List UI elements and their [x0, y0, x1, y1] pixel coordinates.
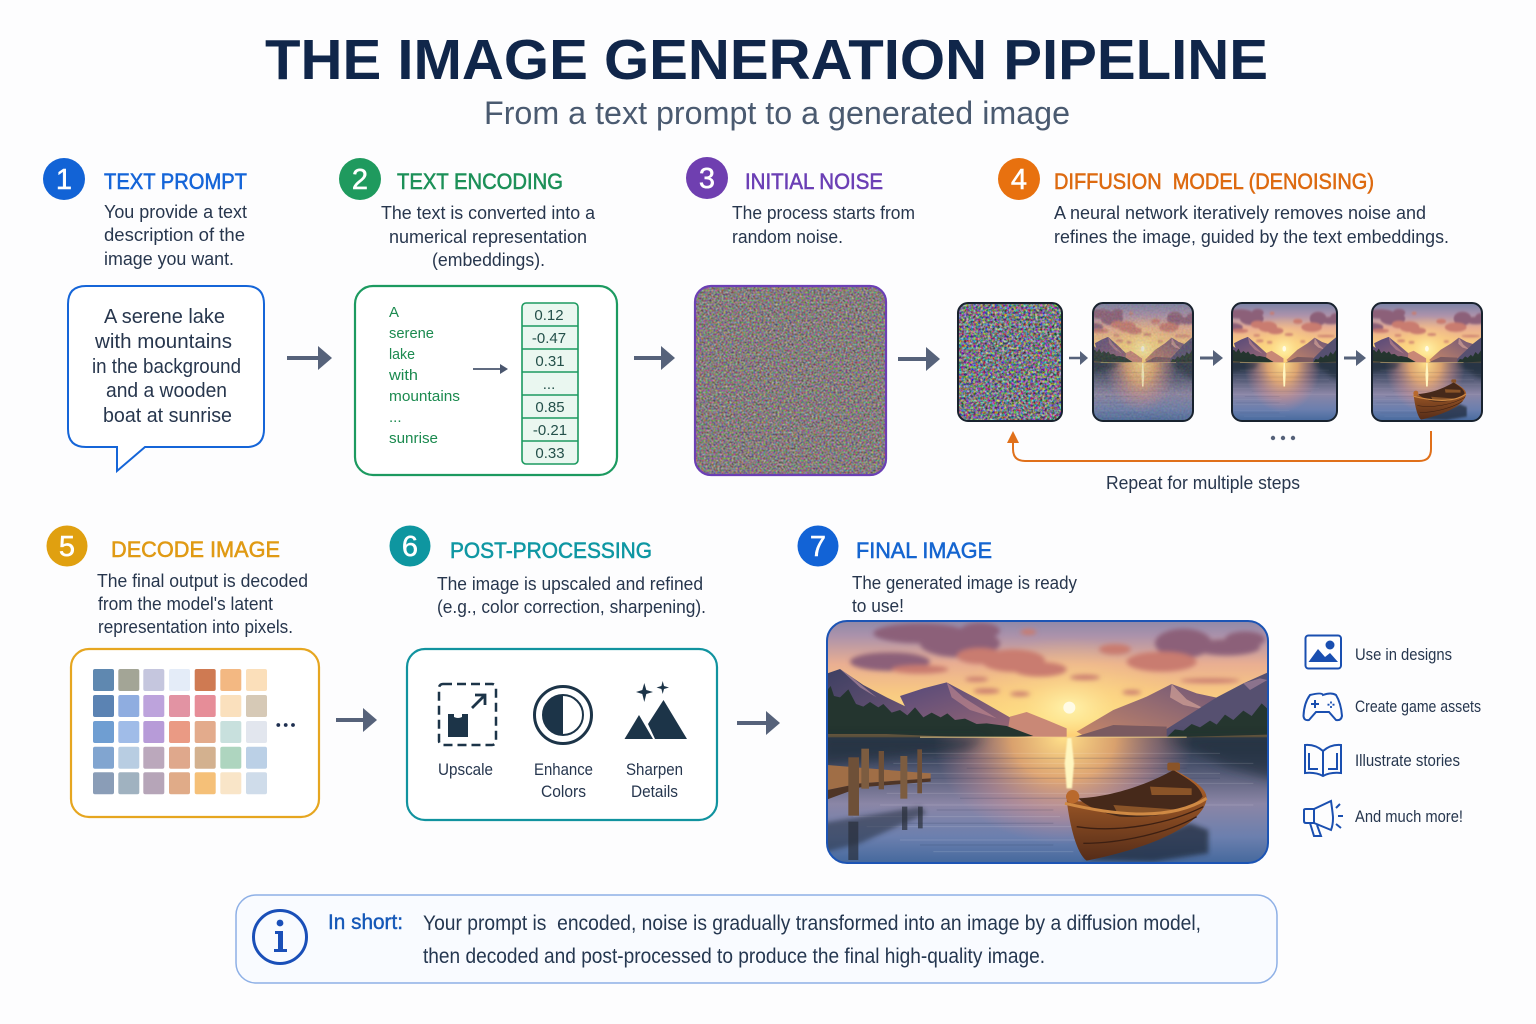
step 7 description	[852, 573, 1077, 616]
denoising frame 3: cleaner scene	[1231, 302, 1338, 422]
embedding vector table: -0.21	[533, 422, 567, 439]
callout box	[236, 895, 1277, 983]
prompt speech bubble: and a wooden	[106, 379, 227, 402]
denoising frame 4: scene with boat	[1371, 302, 1483, 422]
sharpen details label: Sharpen	[626, 760, 683, 779]
token list: sunrise	[389, 430, 438, 447]
step 2 description: The text is converted into a	[381, 203, 596, 223]
embedding vector table: -0.47	[532, 330, 566, 347]
step 2 description	[381, 203, 596, 270]
token list: ...	[389, 409, 402, 426]
step 1 badge: 1	[56, 164, 72, 196]
icon: sharpen details	[624, 681, 687, 739]
enhance colors label: Enhance	[534, 760, 593, 779]
step 4 badge	[998, 158, 1040, 200]
prompt speech bubble	[68, 286, 264, 471]
small arrow	[1344, 350, 1366, 366]
step 1 description: image you want.	[104, 249, 234, 269]
post-processing panel	[407, 649, 717, 820]
step 5 badge	[46, 526, 88, 566]
grid ellipsis	[276, 723, 295, 727]
embedding vector table: ...	[543, 376, 555, 393]
step 5 description: from the model's latent	[98, 594, 273, 614]
repeat loop arrow	[1007, 431, 1431, 461]
step 7 description: The generated image is ready	[852, 573, 1077, 593]
step 3 heading: INITIAL NOISE	[745, 169, 883, 194]
step 5 heading: DECODE IMAGE	[111, 537, 280, 562]
token list: mountains	[389, 388, 460, 405]
repeat label: Repeat for multiple steps	[1106, 473, 1300, 493]
and much more label: And much more!	[1355, 807, 1463, 826]
step 4 description	[1054, 203, 1449, 247]
step 5 badge: 5	[59, 531, 75, 563]
step 3 description: random noise.	[732, 227, 843, 247]
step 6 badge: 6	[402, 531, 418, 563]
step 6 badge	[390, 526, 430, 566]
sharpen details label	[626, 760, 683, 801]
arrow 1 to 2	[287, 346, 332, 370]
sharpen details label: Details	[631, 782, 678, 801]
step 6: post-processing	[390, 526, 717, 820]
pixel grid	[93, 669, 267, 794]
token list: serene	[389, 325, 434, 342]
embedding vector table: 0.33	[535, 445, 565, 462]
small arrow	[1069, 351, 1088, 365]
prompt speech bubble: in the background	[92, 355, 241, 378]
icon: designs	[1306, 636, 1341, 668]
icon: megaphone	[1304, 801, 1343, 836]
step 2 badge	[339, 158, 381, 200]
step 4 description: A neural network iteratively removes noise and	[1054, 203, 1426, 223]
uses list	[1304, 636, 1481, 836]
step 4 description: refines the image, guided by the text embeddings.	[1054, 227, 1449, 247]
embedding vector table	[522, 303, 578, 464]
token list: with	[388, 367, 418, 384]
step 7 badge: 7	[810, 531, 826, 563]
step 7 badge	[798, 526, 838, 566]
title: THE IMAGE GENERATION PIPELINE	[265, 28, 1268, 92]
step 1 heading: TEXT PROMPT	[104, 169, 247, 194]
step 2 description: numerical representation	[389, 227, 587, 247]
icon: upscale	[439, 684, 496, 745]
embedding vector table: 0.31	[535, 353, 565, 370]
subtitle: From a text prompt to a generated image	[484, 95, 1070, 131]
step 3: initial noise	[686, 157, 915, 475]
small arrow	[1200, 350, 1223, 366]
step 3 badge: 3	[699, 163, 715, 195]
create game assets label: Create game assets	[1355, 697, 1481, 716]
final generated image	[826, 620, 1269, 864]
step 7 heading: FINAL IMAGE	[856, 538, 992, 563]
token list: lake	[389, 346, 415, 363]
prompt speech bubble: A serene lake	[104, 305, 225, 328]
prompt speech bubble: with mountains	[94, 330, 232, 353]
step 5 description: representation into pixels.	[98, 617, 293, 637]
summary text: then decoded and post-processed to produce the final high-quality image.	[423, 945, 1045, 968]
encoding panel	[355, 286, 617, 475]
use in designs label: Use in designs	[1355, 645, 1452, 664]
summary callout	[236, 895, 1277, 983]
arrow 5 to 6	[336, 708, 377, 732]
step 2 badge: 2	[352, 164, 368, 196]
step 6 description	[437, 574, 706, 617]
summary text: Your prompt is encoded, noise is gradually transformed into an image by a diffusion model,	[423, 912, 1201, 935]
step 4 heading: DIFFUSION MODEL (DENOISING)	[1054, 169, 1374, 194]
step 2 heading: TEXT ENCODING	[397, 169, 563, 194]
enhance colors label	[534, 760, 593, 801]
step 5 description: The final output is decoded	[97, 571, 308, 591]
enhance colors label: Colors	[541, 782, 586, 801]
arrow 6 to 7	[737, 711, 780, 735]
illustrate stories label: Illustrate stories	[1355, 751, 1460, 770]
step 6 heading: POST-PROCESSING	[450, 538, 652, 563]
decode panel	[71, 649, 319, 817]
upscale label: Upscale	[438, 760, 493, 779]
step 5 description	[97, 571, 308, 637]
step 6 description: (e.g., color correction, sharpening).	[437, 597, 706, 617]
step 5: decode image	[46, 526, 319, 817]
step 7: final image	[798, 526, 1269, 864]
noise panel	[695, 286, 886, 475]
icon: enhance colors	[534, 686, 592, 744]
step 2 description: (embeddings).	[432, 250, 545, 270]
prompt speech bubble: boat at sunrise	[103, 404, 232, 427]
embedding vector table: 0.85	[535, 399, 565, 416]
step 3 description: The process starts from	[732, 203, 915, 223]
icon: game controller	[1304, 694, 1342, 720]
denoising frame 1: pure noise	[958, 303, 1062, 421]
arrow 3 to 4	[898, 347, 940, 371]
step 4 badge: 4	[1011, 164, 1027, 196]
token list	[388, 304, 460, 447]
icon: info	[254, 910, 306, 964]
step 7 description: to use!	[852, 596, 904, 616]
step 1 description	[104, 202, 247, 269]
step 6 description: The image is upscaled and refined	[437, 574, 703, 594]
step 2: text encoding	[339, 158, 617, 475]
step 1 badge	[43, 158, 85, 200]
arrow 2 to 3	[634, 346, 675, 370]
step 1 description: description of the	[104, 225, 245, 245]
token list: A	[389, 304, 399, 321]
step 1: text prompt	[43, 158, 264, 471]
step 3 description	[732, 203, 915, 247]
in short label: In short:	[328, 911, 403, 934]
token to vector arrow	[473, 364, 508, 374]
step 4: diffusion model	[958, 158, 1495, 493]
ellipsis dots	[1271, 436, 1295, 440]
icon: open book	[1305, 745, 1341, 776]
embedding vector table: 0.12	[534, 307, 564, 324]
summary text	[423, 912, 1201, 968]
step 3 badge	[686, 157, 728, 199]
denoising frame 2: noisy scene	[1092, 302, 1194, 422]
step 1 description: You provide a text	[104, 202, 247, 222]
